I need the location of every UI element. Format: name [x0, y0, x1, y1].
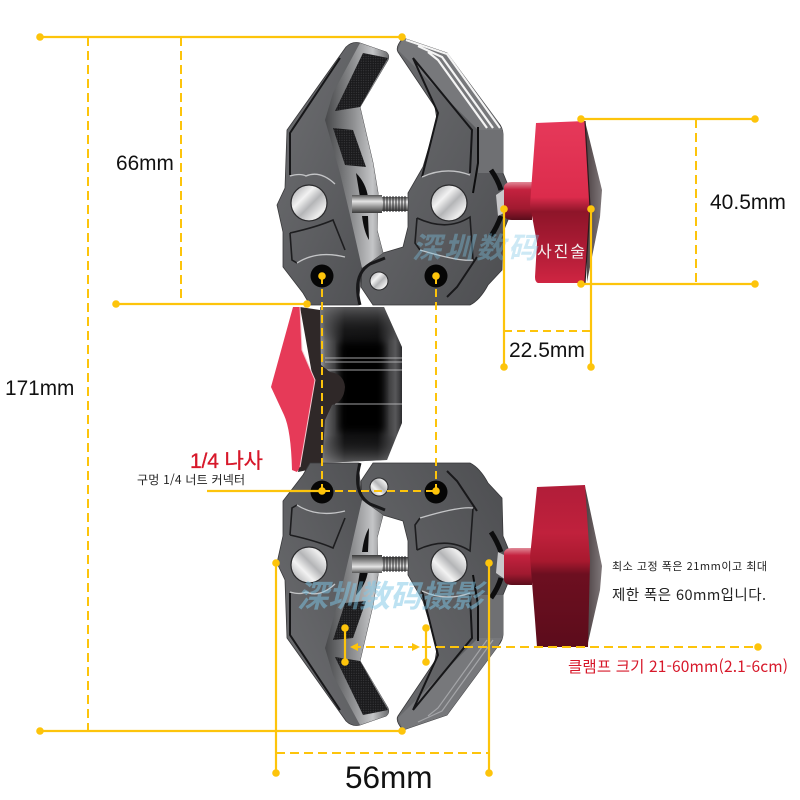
ball joint body	[320, 307, 402, 463]
dimension: clamp range	[341, 624, 788, 677]
note line 1: 최소 고정 폭은 21mm이고 최대	[612, 558, 767, 574]
dimension: knob height 40.5mm	[577, 115, 786, 288]
watermark top: 深圳数码	[412, 225, 540, 267]
label 1/4 nut connector: 구멍 1/4 너트 커넥터	[137, 471, 245, 488]
top clamp	[277, 38, 602, 305]
bottom clamp	[277, 463, 602, 730]
bottom red knob	[504, 485, 602, 647]
top red knob	[504, 121, 602, 283]
product: ball joint and rear knob	[271, 307, 402, 472]
dimension: clamp height 66mm	[112, 37, 311, 308]
label 56mm: 56mm	[345, 759, 433, 795]
label 40.5mm: 40.5mm	[710, 191, 786, 214]
label 22.5mm: 22.5mm	[509, 339, 585, 362]
dimension: overall height 171mm	[5, 33, 406, 735]
dimension: width 56mm	[272, 559, 493, 795]
left knob	[271, 307, 345, 472]
knob label: 사진술	[537, 238, 585, 262]
note line 2: 제한 폭은 60mm입니다.	[612, 584, 766, 605]
dimension: 1/4 screw holes	[137, 272, 440, 495]
label 1/4 screw: 1/4 나사	[190, 450, 263, 473]
dimension: knob width 22.5mm	[500, 205, 595, 371]
arrowheads	[350, 643, 420, 651]
label clamp size: 클램프 크기 21-60mm(2.1-6cm)	[568, 655, 788, 677]
label 171mm: 171mm	[5, 377, 74, 400]
label 66mm: 66mm	[116, 152, 174, 175]
note: clamp width	[612, 558, 767, 605]
watermark bottom: 深圳数码摄影	[297, 571, 488, 616]
